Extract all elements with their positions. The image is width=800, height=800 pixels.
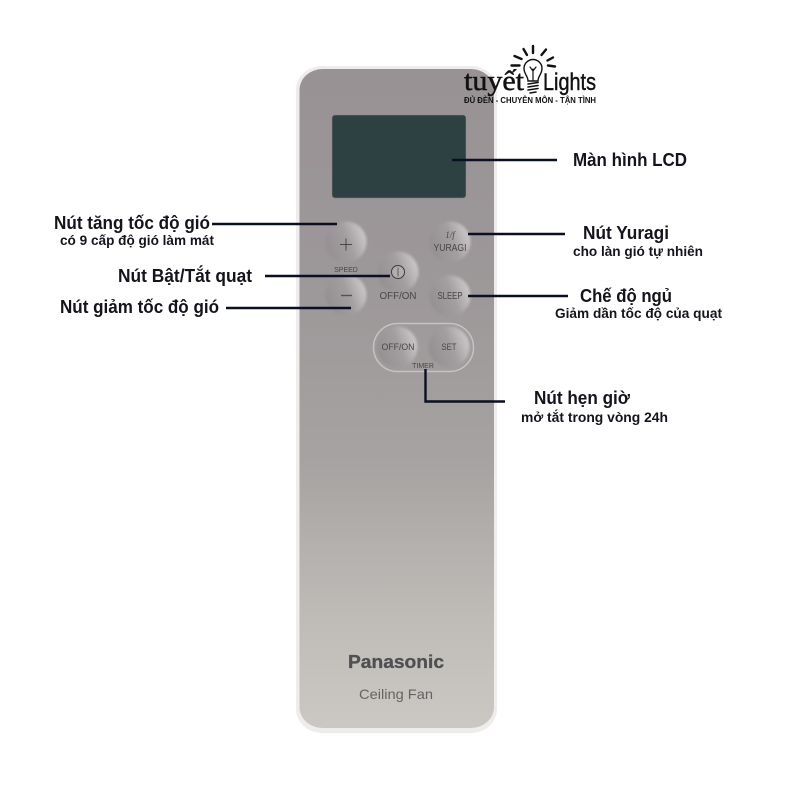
label: yuragi: Nút Yuragi: [583, 222, 669, 243]
label: yuragi: cho làn gió tự nhiên: [573, 243, 703, 259]
label: timer: mở tắt trong vòng 24h: [521, 408, 668, 425]
label: speed down: Nút giảm tốc độ gió: [60, 296, 219, 317]
label: sleep: [555, 285, 722, 321]
remote face: [300, 69, 494, 728]
label: speed up: có 9 cấp độ gió làm mát: [60, 232, 214, 248]
button: yuragi: YURAGI: [434, 243, 466, 254]
LCD screen: [332, 115, 466, 198]
logo wordmark left: tuyết: [464, 65, 524, 97]
button: power: [378, 252, 418, 292]
button: sleep: [430, 276, 470, 316]
button: speed down: [326, 274, 366, 316]
timer group: TIMER: [412, 363, 434, 370]
leader: sleep: [468, 295, 568, 297]
remote white casing: [296, 66, 497, 733]
leader: speed up: [212, 223, 337, 225]
label: power: Nút Bật/Tắt quạt: [118, 265, 252, 286]
label: timer: [521, 387, 668, 425]
logo: Tuyết Lights: [464, 46, 596, 105]
leader: power: [265, 275, 390, 277]
leader: yuragi: [468, 233, 565, 235]
leader: timer: [426, 369, 505, 402]
label: off/on: OFF/ON: [380, 291, 416, 302]
brand: Panasonic: Panasonic: [348, 651, 444, 672]
label: yuragi: [573, 222, 703, 259]
button: speed up: [326, 222, 366, 262]
timer group: SET: [442, 342, 457, 353]
timer group: OFF/ON: [382, 342, 415, 353]
button: sleep: SLEEP: [438, 291, 463, 302]
product: Ceiling Fan: Ceiling Fan: [359, 686, 433, 702]
timer group: [374, 324, 474, 372]
label: timer: Nút hẹn giờ: [534, 387, 631, 408]
label: speed: SPEED: [334, 267, 358, 274]
button: yuragi: [430, 222, 470, 262]
leader: speed down: [226, 307, 351, 309]
button: yuragi: 1/f: [445, 230, 456, 240]
logo tagline: ĐỦ ĐÈN - CHUYÊN MÔN - TẬN TÌNH: [464, 96, 596, 105]
label: LCD: Màn hình LCD: [573, 149, 687, 170]
label: speed up: Nút tăng tốc độ gió: [54, 212, 210, 233]
label: sleep: Giảm dần tốc độ của quạt: [555, 305, 722, 321]
remote control: [296, 66, 497, 733]
leader: LCD: [452, 159, 557, 161]
icon: light bulb: [512, 46, 555, 93]
label: sleep: Chế độ ngủ: [580, 285, 672, 306]
label: speed up: [54, 212, 214, 248]
logo wordmark right: Lights: [543, 69, 596, 96]
